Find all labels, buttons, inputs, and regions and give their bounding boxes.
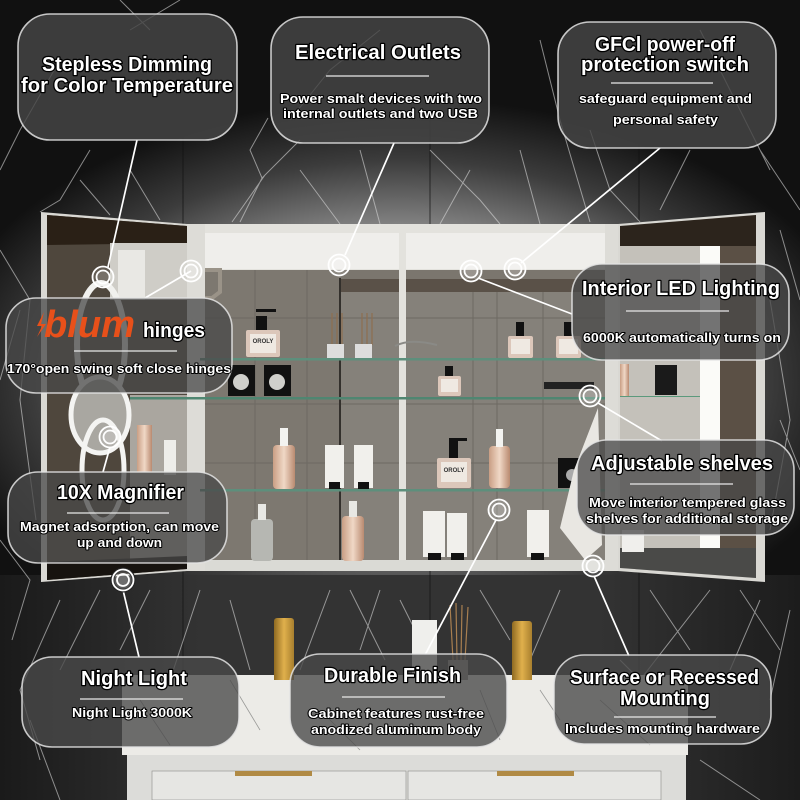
panel: durable finish: Cabinet features rust-free xyxy=(308,706,484,721)
reed diffusers xyxy=(327,313,372,358)
panel: adjustable shelves xyxy=(577,440,794,535)
panel: electrical outlets: Power smalt devices with two xyxy=(280,91,482,106)
panel: electrical outlets: internal outlets and two USB xyxy=(283,106,478,121)
right door mirror xyxy=(618,212,765,582)
panel: durable finish: anodized aluminum body xyxy=(311,722,482,737)
callout markers xyxy=(92,254,604,590)
marker: mounting xyxy=(582,556,604,576)
panel: surface or recessed mounting: Surface or Recessed xyxy=(570,667,759,689)
black jars xyxy=(228,365,583,488)
marker: shelves xyxy=(580,386,600,406)
hinge xyxy=(205,270,220,298)
panel: surface or recessed mounting: Mounting xyxy=(620,688,710,710)
marker: magnifier xyxy=(100,426,120,448)
marker: night light xyxy=(112,570,134,590)
panel: stepless dimming xyxy=(18,14,237,140)
panel: stepless dimming: for Color Temperature xyxy=(21,75,233,97)
panel: magnifier: 10X Magnifier xyxy=(57,482,184,504)
panel: night light: Night Light xyxy=(81,668,187,690)
panel: GFCl switch: protection switch xyxy=(581,54,749,76)
blum logo: blum xyxy=(44,304,135,346)
marker: dimming xyxy=(92,266,114,288)
panel: GFCl switch: personal safety xyxy=(613,112,719,127)
marker: GFCI xyxy=(504,258,526,280)
panel: magnifier xyxy=(8,472,227,563)
magnifier oval on door xyxy=(71,283,129,520)
panel: GFCl switch: safeguard equipment and xyxy=(579,91,752,106)
drawer handles xyxy=(235,771,574,776)
panel: surface or recessed mounting xyxy=(554,655,771,744)
panel: electrical outlets: Electrical Outlets xyxy=(295,42,461,64)
gold faucets xyxy=(274,618,532,680)
panel: night light xyxy=(22,657,239,747)
pump bottles: OROLY: OROLY xyxy=(253,339,273,345)
panel: adjustable shelves: Move interior tempered glass xyxy=(589,495,786,510)
shelf products xyxy=(228,309,602,561)
panel: interior LED: 6000K automatically turns on xyxy=(583,330,781,345)
shower hardware xyxy=(395,342,437,346)
amber pump bottles xyxy=(251,428,510,561)
towel and hook rail xyxy=(544,382,602,560)
panel: durable finish: Durable Finish xyxy=(324,665,461,687)
panel: electrical outlets xyxy=(271,17,489,143)
pump bottles: OROLY: OROLY xyxy=(444,468,464,474)
vanity countertop and cabinet xyxy=(122,675,688,800)
panel: adjustable shelves: shelves for additional storage xyxy=(586,511,788,526)
cabinet interior xyxy=(187,224,618,571)
leader lines xyxy=(103,140,662,657)
marker: hinges xyxy=(180,260,202,282)
panel: stepless dimming: Stepless Dimming xyxy=(42,54,212,76)
marker: LED xyxy=(460,260,482,282)
left door mirror xyxy=(41,212,187,582)
marker: outlets xyxy=(328,254,350,276)
panel: interior LED: Interior LED Lighting xyxy=(582,278,780,300)
panel: GFCl switch: GFCl power-off xyxy=(595,34,735,56)
panel: adjustable shelves: Adjustable shelves xyxy=(591,453,773,475)
panel: blum hinges: hinges xyxy=(143,320,205,342)
panel: magnifier: Magnet adsorption, can move xyxy=(20,519,219,534)
tube and reed diffuser on counter xyxy=(412,603,468,680)
marker: finish xyxy=(488,500,510,520)
glass shelves xyxy=(130,358,605,492)
panel: surface or recessed mounting: Includes mounting hardware xyxy=(565,721,760,736)
panel: blum hinges xyxy=(6,298,232,393)
panel: magnifier: up and down xyxy=(77,535,162,550)
panel: night light: Night Light 3000K xyxy=(72,705,193,720)
panel: blum hinges: 170°open swing soft close hinges xyxy=(7,361,231,376)
white tubes xyxy=(325,445,549,560)
panel: GFCl switch xyxy=(558,22,776,148)
panel: durable finish xyxy=(290,654,507,747)
panel: interior LED xyxy=(572,264,789,360)
pump bottles: OROLY xyxy=(246,309,581,488)
